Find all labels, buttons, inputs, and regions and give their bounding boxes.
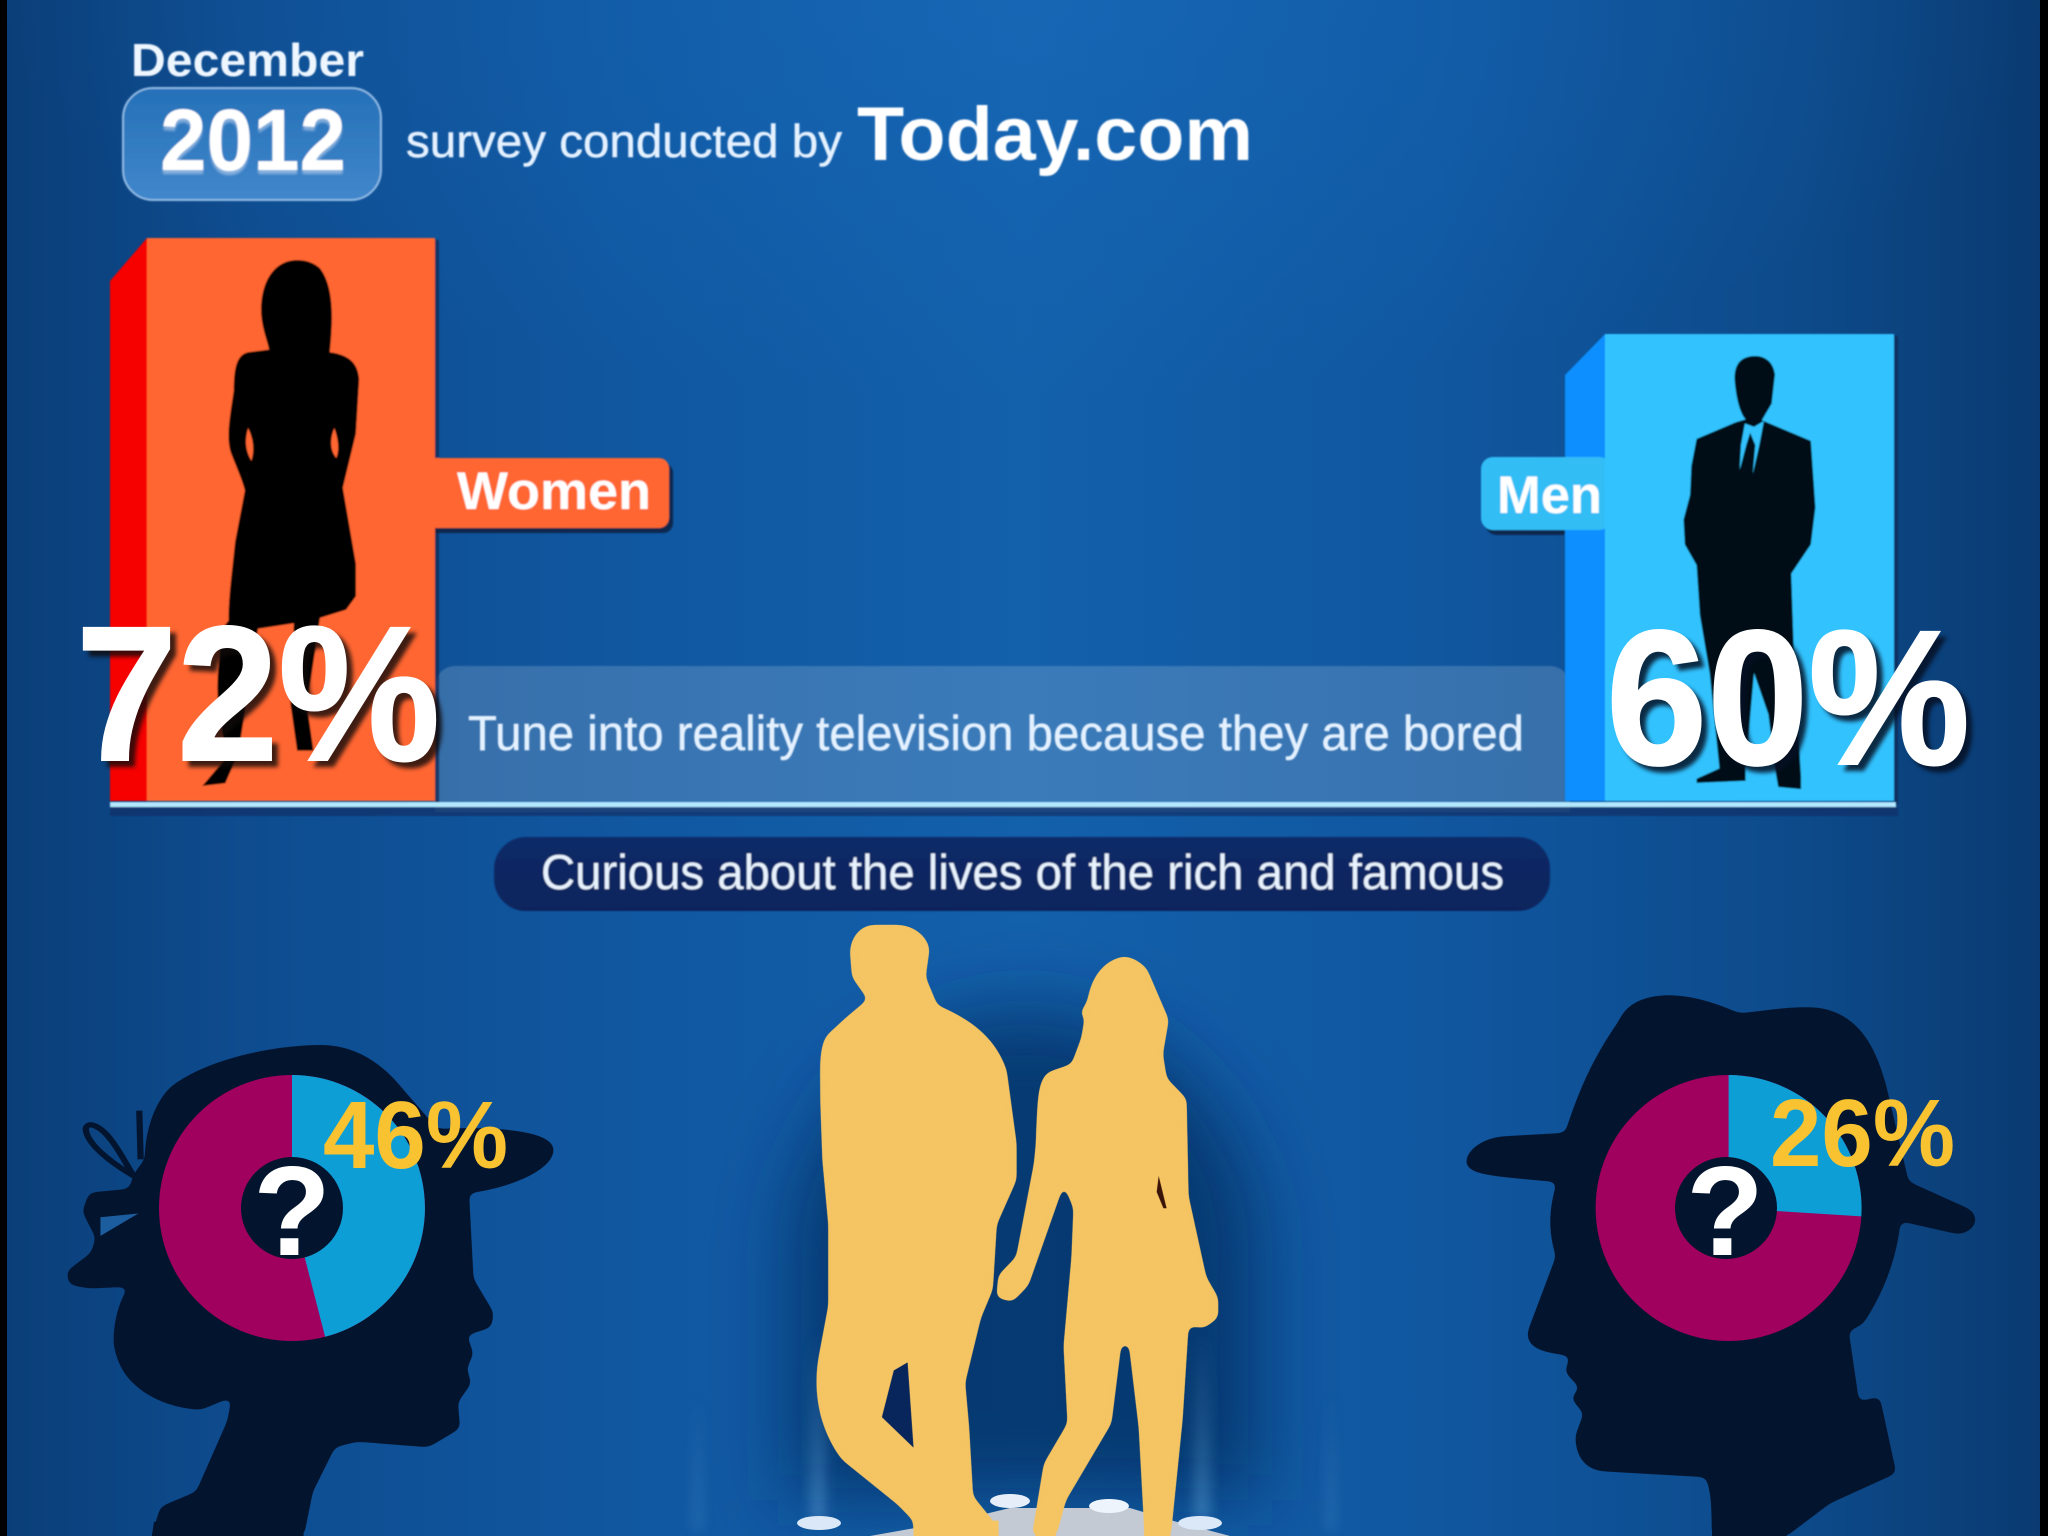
man head silhouette [1466, 996, 1975, 1536]
survey source line: Today.com [857, 92, 1253, 177]
heading pill: curious about the rich and famous [494, 837, 1550, 911]
baseline rule [110, 802, 1898, 816]
men label tag: Men [1497, 466, 1602, 525]
man figure [817, 925, 1016, 1536]
head chart: women 46% [67, 1045, 554, 1536]
survey source line: survey conducted by [406, 115, 842, 167]
women label tag: Women [457, 462, 651, 521]
men label tag [1481, 334, 1611, 801]
spotlight beams [693, 1330, 1336, 1530]
stat: 60%: 60% [1606, 590, 1970, 805]
couple silhouette [817, 925, 1218, 1536]
date heading: December 2012 [123, 34, 381, 200]
statement panel [435, 666, 1570, 812]
date heading: December 2012: December [131, 34, 364, 86]
man silhouette [1684, 356, 1815, 789]
survey source line [406, 92, 1253, 177]
date heading: December 2012: 2012 [160, 92, 346, 189]
head chart: men 26% [1466, 996, 1975, 1536]
spotlights [797, 1494, 1230, 1536]
woman head silhouette [67, 1045, 554, 1536]
donut chart: 26% [1596, 1075, 1862, 1341]
stage with couple [693, 925, 1336, 1536]
bar: men 60% [1481, 334, 1898, 804]
woman silhouette [202, 260, 359, 786]
woman figure [997, 957, 1218, 1536]
heading pill: curious about the rich and famous: Curious about the lives of the rich and famous [541, 846, 1504, 900]
question mark: ? [253, 1140, 331, 1282]
percent: 46%: 46% [323, 1082, 508, 1189]
stat: 72%: 72% [76, 586, 440, 801]
percent: 26%: 26% [1770, 1080, 1955, 1187]
statement panel: Tune into reality television because they are bored [468, 707, 1524, 761]
donut chart: 46% [159, 1075, 425, 1341]
bar: women 72% [110, 238, 673, 804]
question mark: ? [1686, 1140, 1764, 1282]
women label tag [420, 458, 673, 533]
